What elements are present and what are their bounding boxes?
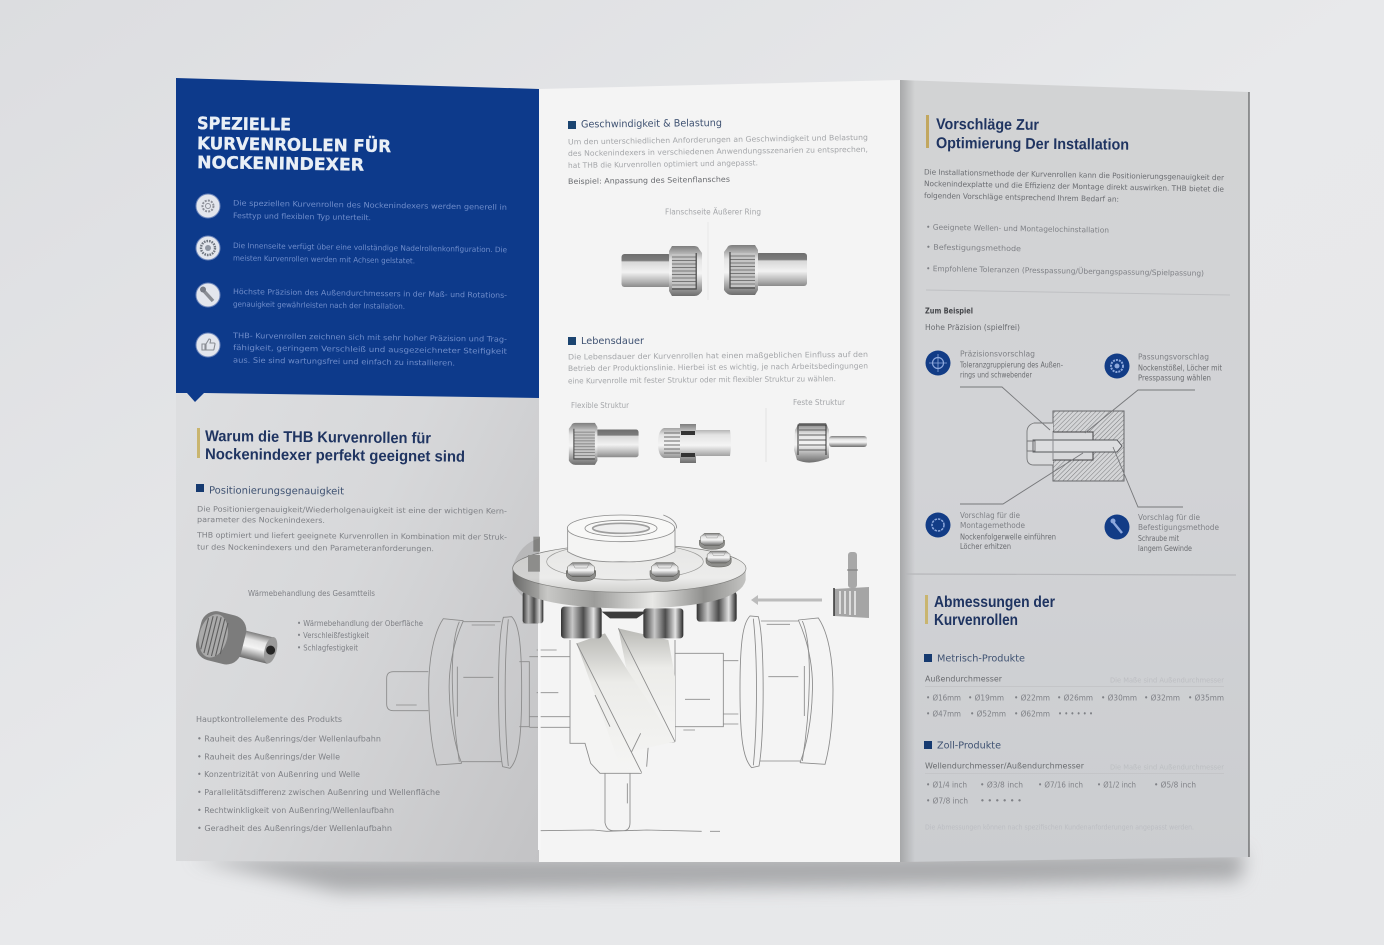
section: metric products: Die Maße sind Außendurchmesser bbox=[1110, 676, 1224, 684]
heading: warum THB bbox=[197, 428, 465, 466]
list: main control elements: • Rauheit des Außenrings/der Welle bbox=[197, 752, 340, 762]
fold highlight bbox=[538, 623, 541, 850]
inch sizes: • Ø3/8 inch bbox=[980, 780, 1023, 790]
heading: warum THB: Warum die THB Kurvenrollen für bbox=[205, 428, 431, 447]
heading: installation: Vorschläge Zur bbox=[936, 116, 1039, 134]
callout: mounting: Löcher erhitzen bbox=[960, 542, 1011, 551]
text block: speed paragraph: des Nockenindexers in verschiedenen Anwendungsszenarien zu entsprechen, bbox=[568, 145, 868, 158]
metal rollers under flange bbox=[523, 592, 737, 638]
text block: positioning paragraph bbox=[196, 505, 507, 553]
text block: intro bullets: aus. Sie sind wartungsfrei und einfach zu installieren. bbox=[233, 356, 455, 368]
bolts bbox=[528, 533, 731, 581]
text block: positioning paragraph: tur des Nockenindexers und den Parameteranforderungen. bbox=[197, 543, 434, 553]
text block: intro bullets: genauigkeit gewährleisten nach der Installation. bbox=[233, 300, 405, 311]
section: metric products: Metrisch-Produkte bbox=[937, 654, 1025, 664]
list: main control elements: • Rechtwinkligkeit von Außenring/Wellenlaufbahn bbox=[197, 806, 394, 815]
heading: dimensions bbox=[925, 594, 1055, 629]
text block: positioning paragraph: THB optimiert und liefert geeignete Kurvenrollen in Kombination mit der Struk- bbox=[196, 530, 507, 542]
text block: intro bullets: Die speziellen Kurvenrollen des Nockenindexers werden generell in bbox=[233, 199, 507, 212]
icon: gear outline bbox=[196, 194, 220, 218]
section: inch products: Zoll-Produkte bbox=[937, 740, 1001, 752]
label: fixed structure: Feste Struktur bbox=[793, 398, 846, 407]
left stub shaft bbox=[387, 672, 428, 711]
list: main control elements: • Rauheit des Außenrings/der Wellenlaufbahn bbox=[197, 734, 381, 744]
section: inch products: Die Maße sind Außendurchmesser bbox=[1110, 764, 1224, 772]
text block: installation paragraph: Nockenindexplatte und die Effizienz der Montage direkt auswirken. THB bietet die bbox=[924, 179, 1224, 194]
callout: precision bbox=[926, 350, 1063, 380]
text block: example heading: Hohe Präzision (spielfrei) bbox=[925, 323, 1020, 332]
text block: speed paragraph: Beispiel: Anpassung des Seitenflansches bbox=[568, 175, 730, 186]
inch sizes: • Ø1/4 inch bbox=[926, 780, 967, 790]
darker tint left of fold bbox=[513, 538, 539, 624]
inch sizes: • Ø1/2 inch bbox=[1097, 780, 1136, 790]
heading: installation bbox=[926, 115, 1129, 154]
list: heat treatment properties bbox=[297, 619, 423, 652]
list: heat treatment properties: • Wärmebehandlung der Oberfläche bbox=[297, 619, 423, 628]
text block: service life paragraph: eine Kurvenrolle mit fester Struktur oder mit flexibler Struktur zu wählen. bbox=[568, 374, 836, 385]
icon: screw bbox=[196, 283, 220, 307]
callout: fastening: Befestigungsmethode bbox=[1138, 523, 1219, 532]
section: inch products bbox=[924, 740, 1224, 806]
metric sizes: • Ø19mm bbox=[968, 694, 1004, 702]
text block: intro bullets bbox=[232, 199, 507, 368]
text block: intro bullets: THB- Kurvenrollen zeichnen sich mit sehr hoher Präzision und Trag- bbox=[232, 331, 507, 344]
panel: middle page bbox=[539, 80, 900, 862]
metric sizes: • Ø16mm bbox=[926, 694, 961, 702]
text block: service life paragraph bbox=[568, 350, 868, 385]
title: KURVENROLLEN FÜR bbox=[197, 132, 391, 157]
left wheel line drawing bbox=[429, 617, 522, 768]
list: main control elements bbox=[196, 715, 440, 833]
output shaft and base line bbox=[540, 773, 720, 831]
text block: service life paragraph: Die Lebensdauer der Kurvenrollen hat einen maßgeblichen Einfluss auf den bbox=[568, 350, 868, 361]
diagram: cross section bbox=[960, 387, 1195, 507]
arrow: insert roller bbox=[751, 595, 822, 605]
subheading: service life: Lebensdauer bbox=[581, 336, 645, 347]
text block: speed paragraph bbox=[568, 133, 868, 186]
inch sizes: • Ø5/8 inch bbox=[1154, 780, 1196, 790]
metric sizes: • Ø32mm bbox=[1144, 694, 1180, 702]
subheading: speed and load: Geschwindigkeit & Belastung bbox=[581, 118, 722, 130]
cam body bbox=[570, 628, 675, 773]
list: main control elements: • Konzentrizität von Außenring und Welle bbox=[197, 770, 360, 779]
list: suggestions: • Befestigungsmethode bbox=[926, 243, 1022, 253]
list: main control elements: • Parallelitätsdifferenz zwischen Außenring und Wellenfläche bbox=[197, 788, 440, 797]
inch sizes: • Ø7/8 inch bbox=[926, 796, 968, 806]
label: heat treatment: Wärmebehandlung des Gesamtteils bbox=[248, 589, 375, 598]
illustration: cam indexer assembly bbox=[387, 515, 833, 850]
text block: positioning paragraph: parameter des Nockenindexers. bbox=[197, 515, 325, 525]
image: two flange rollers bbox=[622, 222, 807, 300]
callout: fastening: Vorschlag für die bbox=[1138, 513, 1200, 522]
horizontal shafts line drawing bbox=[519, 650, 738, 730]
section: metric products bbox=[924, 654, 1224, 718]
callout: fastening: Schraube mit bbox=[1138, 534, 1179, 543]
callout: mounting: Nockenfolgerwelle einführen bbox=[960, 532, 1056, 542]
metric sizes: • Ø30mm bbox=[1101, 694, 1137, 702]
panel: left page bbox=[176, 78, 539, 862]
text block: speed paragraph: hat THB die Kurvenrollen optimiert und angepasst. bbox=[568, 158, 758, 170]
list: suggestions bbox=[926, 223, 1204, 278]
text block: example heading: Zum Beispiel bbox=[925, 306, 973, 316]
text block: intro bullets: Höchste Präzision des Außendurchmessers in der Maß- und Rotations- bbox=[233, 287, 507, 300]
text block: intro bullets: fähigkeit, geringem Verschleiß und ausgezeichneter Steifigkeit bbox=[233, 343, 507, 356]
title: SPEZIELLE bbox=[197, 114, 291, 135]
callout: mounting bbox=[926, 511, 1056, 551]
metric sizes: • Ø47mm bbox=[926, 710, 961, 718]
section: inch products: Wellendurchmesser/Außendurchmesser bbox=[925, 762, 1085, 770]
metric sizes: • Ø22mm bbox=[1014, 694, 1050, 702]
text block: positioning paragraph: Die Positioniergenauigkeit/Wiederholgenauigkeit ist eine der wichtigen Kern- bbox=[197, 505, 507, 516]
section: metric products: Außendurchmesser bbox=[925, 674, 1003, 684]
image: fixed roller bbox=[766, 408, 867, 463]
right wheel line drawing bbox=[740, 616, 833, 768]
list: suggestions: • Geeignete Wellen- und Montagelochinstallation bbox=[926, 223, 1109, 235]
panel: blue intro block bbox=[176, 78, 539, 402]
heading: warum THB: Nockenindexer perfekt geeignet sind bbox=[205, 446, 465, 466]
callout: fit: Passungsvorschlag bbox=[1138, 352, 1209, 362]
list: main control elements: Hauptkontrollelemente des Produkts bbox=[196, 715, 342, 724]
icon: bearing bbox=[196, 236, 220, 260]
callout: fit bbox=[1104, 352, 1222, 382]
callout: precision: Präzisionsvorschlag bbox=[960, 350, 1035, 358]
brochure shadow bbox=[190, 852, 1245, 892]
inch sizes bbox=[926, 780, 1196, 806]
panel: right page bbox=[900, 80, 1249, 862]
callout: fastening: langem Gewinde bbox=[1138, 544, 1192, 553]
list: heat treatment properties: • Schlagfestigkeit bbox=[297, 644, 358, 652]
image: flexible rollers bbox=[569, 423, 731, 465]
callout: precision: rings und schwebender bbox=[960, 370, 1033, 380]
note: customised dimensions: Die Abmessungen können nach spezifischen Kundenanforderungen angepasst werden. bbox=[925, 824, 1194, 832]
text block: intro bullets: Die Innenseite verfügt über eine vollständige Nadelrollenkonfiguration. Die bbox=[233, 241, 507, 254]
text block: installation paragraph: Die Installationsmethode der Kurvenrollen kann die Positionierungsgenauigkeit der bbox=[924, 168, 1225, 182]
inch sizes: • • • • • • bbox=[980, 796, 1022, 806]
leader lines bbox=[960, 387, 1195, 507]
image: cam roller perspective bbox=[193, 608, 282, 676]
callout: fastening bbox=[1104, 513, 1219, 553]
subheading: positionierungsgenauigkeit: Positionierungsgenauigkeit bbox=[209, 486, 344, 497]
text block: example heading bbox=[925, 306, 1020, 332]
metric sizes: • Ø35mm bbox=[1188, 694, 1224, 702]
image: vertical mini roller bbox=[834, 552, 869, 618]
title: NOCKENINDEXER bbox=[197, 153, 364, 176]
inch sizes: • Ø7/16 inch bbox=[1038, 780, 1083, 790]
list: main control elements: • Geradheit des Außenrings/der Wellenlaufbahn bbox=[197, 824, 392, 833]
text block: speed paragraph: Um den unterschiedlichen Anforderungen an Geschwindigkeit und Belastung bbox=[568, 133, 868, 146]
title bbox=[197, 114, 391, 176]
metric sizes: • • • • • • bbox=[1058, 710, 1093, 718]
text block: intro bullets: meisten Kurvenrollen werden mit Achsen gelstatet. bbox=[233, 254, 415, 265]
list: heat treatment properties: • Verschleißfestigkeit bbox=[297, 631, 369, 640]
list: suggestions: • Empfohlene Toleranzen (Presspassung/Übergangspassung/Spielpassung) bbox=[926, 264, 1204, 278]
callout: fit: Nockenstößel, Löcher mit bbox=[1138, 364, 1222, 372]
metric sizes bbox=[926, 694, 1224, 718]
heading: dimensions: Abmessungen der bbox=[934, 594, 1055, 611]
callout: precision: Toleranzgruppierung des Außen- bbox=[959, 360, 1063, 370]
metric sizes: • Ø26mm bbox=[1057, 694, 1093, 702]
text block: intro bullets: Festtyp und flexiblen Typ unterteilt. bbox=[233, 211, 371, 222]
top hub cylinder bbox=[567, 515, 677, 562]
callout: mounting: Montagemethode bbox=[960, 521, 1025, 530]
icon: thumbs up bbox=[196, 333, 220, 357]
flange plate bbox=[513, 543, 746, 609]
label: flange side: Flanschseite Äußerer Ring bbox=[665, 208, 761, 216]
callout: fit: Presspassung wählen bbox=[1138, 374, 1211, 382]
text block: installation paragraph: folgenden Vorschläge entsprechend Ihrem Bedarf an: bbox=[924, 191, 1119, 204]
heading: dimensions: Kurvenrollen bbox=[934, 612, 1018, 629]
callout: mounting: Vorschlag für die bbox=[960, 511, 1020, 520]
heading: installation: Optimierung Der Installation bbox=[936, 135, 1129, 154]
text block: service life paragraph: Betrieb der Produktionslinie. Hierbei ist es wichtig, je nach Arbeitsbedingungen bbox=[568, 361, 868, 373]
metric sizes: • Ø62mm bbox=[1014, 710, 1050, 718]
label: flexible structure: Flexible Struktur bbox=[571, 401, 630, 410]
text block: installation paragraph bbox=[924, 168, 1225, 204]
metric sizes: • Ø52mm bbox=[970, 710, 1006, 718]
